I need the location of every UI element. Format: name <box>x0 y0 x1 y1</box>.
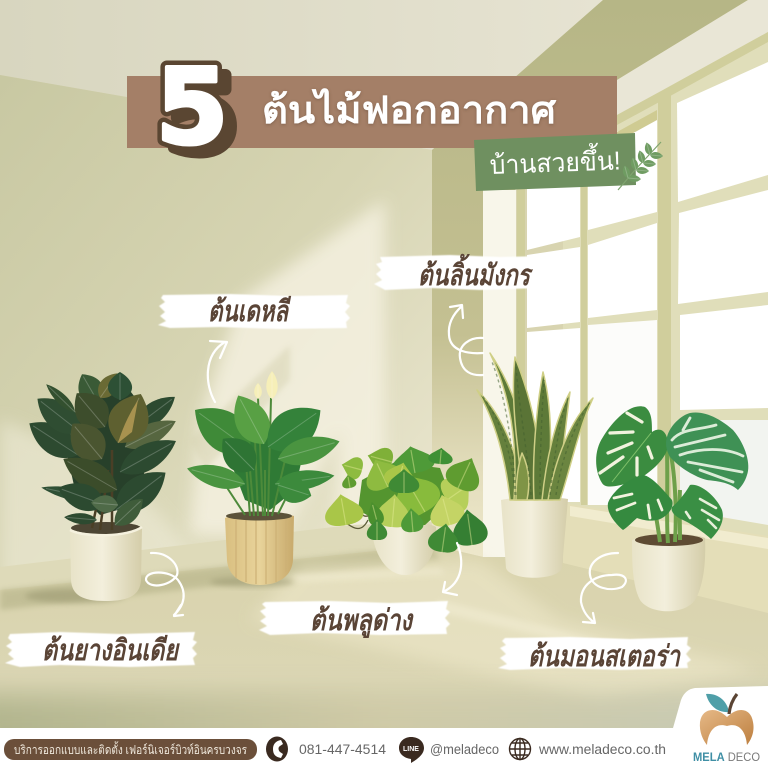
heading: ต้นไม้ฟอกอากาศ <box>262 88 557 132</box>
logo: mela deco <box>673 686 768 768</box>
label: snake plant: ต้นลิ้นมังกร <box>418 253 533 292</box>
pot: monstera <box>632 534 705 611</box>
window <box>516 32 768 613</box>
icon: phone <box>266 736 288 762</box>
plant: pothos <box>321 443 489 575</box>
arrow: rubber plant <box>146 553 184 616</box>
icon: leaf sprig <box>618 142 663 190</box>
subtitle tag <box>474 133 636 191</box>
website: www.meladeco.co.th <box>538 742 666 757</box>
plant: peace lily <box>183 371 343 587</box>
service pill <box>4 739 257 760</box>
icon: line: LINE <box>403 746 419 753</box>
blade stripes: snake plant <box>481 362 590 495</box>
flowers: peace lily <box>254 371 278 399</box>
arrow: snake plant <box>449 305 483 375</box>
phone number: 081-447-4514 <box>299 742 387 757</box>
arrow: pothos <box>443 543 461 595</box>
label: pothos: ต้นพลูด่าง <box>310 605 414 639</box>
plant: rubber plant <box>21 368 182 603</box>
label: rubber plant <box>5 632 197 667</box>
label: pothos <box>259 601 450 639</box>
number 5: 5 <box>156 46 228 168</box>
label: rubber plant: ต้นยางอินเดีย <box>42 634 180 667</box>
leaf: lower right <box>672 485 723 539</box>
icon: line <box>399 737 424 763</box>
pot: rubber plant <box>25 522 142 603</box>
pot: peace lily <box>210 512 294 587</box>
plant: snake plant <box>477 353 593 578</box>
pot: snake plant <box>501 497 568 578</box>
plant: monstera <box>596 406 748 611</box>
leaf: upper right <box>666 412 748 490</box>
subtitle tag: บ้านสวยขึ้น! <box>489 141 621 180</box>
pot: pothos <box>372 522 436 575</box>
pot rim: rubber plant <box>70 527 142 535</box>
arrow: peace lily <box>208 341 227 402</box>
service pill: บริการออกแบบและติดตั้ง เฟอร์นิเจอร์บิวท์อินครบวงจร <box>14 741 247 757</box>
label: peace lily <box>158 294 350 329</box>
leaf: lower left <box>608 475 673 530</box>
label: monstera: ต้นมอนสเตอร่า <box>528 641 681 673</box>
label: snake plant <box>374 253 545 292</box>
arrow: monstera <box>581 553 626 623</box>
icon: globe <box>510 738 531 760</box>
number 5: 5 <box>156 46 228 168</box>
label: peace lily: ต้นเดหลี <box>208 295 292 328</box>
icon: apple <box>700 694 754 745</box>
title banner <box>127 46 617 176</box>
line id: @meladeco <box>430 742 499 757</box>
leaf: upper left <box>596 406 668 487</box>
footer bar <box>0 728 768 768</box>
brand name: MELA DECO <box>693 752 760 764</box>
label: monstera <box>498 637 691 673</box>
number 5: 5 <box>166 54 238 176</box>
